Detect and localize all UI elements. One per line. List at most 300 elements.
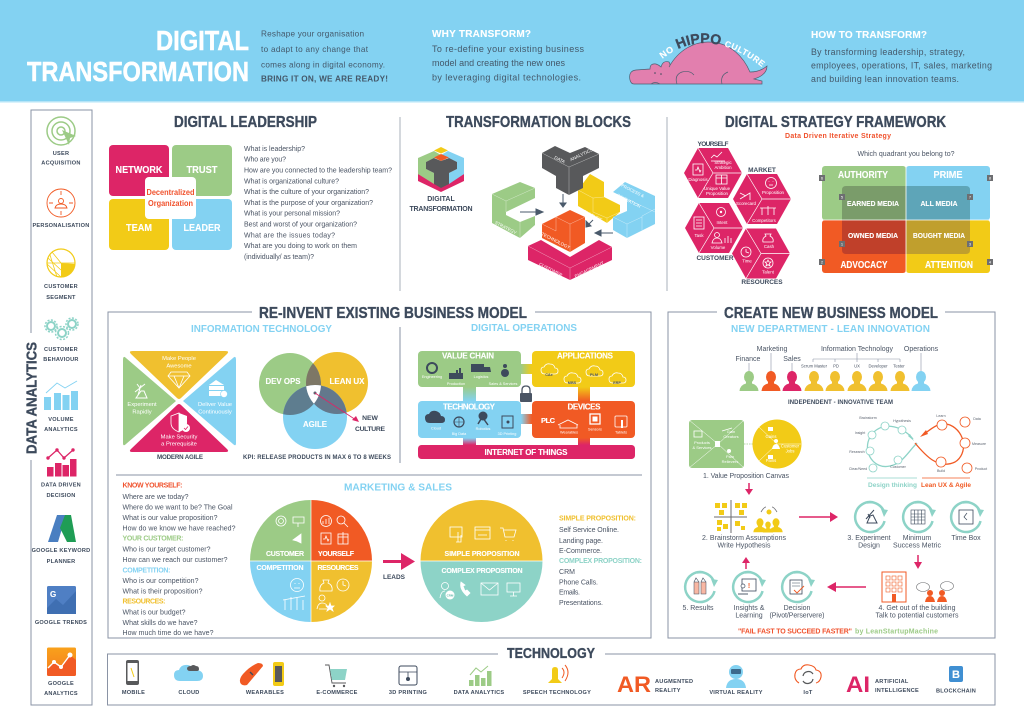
diagram: venn new culture [259,352,385,449]
diagram: modern agile: Rapidly [132,410,152,416]
minimum success metric: Minimum [903,535,931,542]
kpi note: KPI: RELEASE PRODUCTS IN MAX 6 TO 8 WEEKS [243,455,391,461]
insights and learning [731,570,766,620]
step 4: get out of the building: Talk to potential customers [876,612,959,620]
item: augmented reality: AR [617,672,651,697]
item: mobile: MOBILE [122,690,145,696]
arrow: leads: LEADS [383,574,406,581]
block: applications: ERP [613,381,621,385]
how to transform: employees, operations, IT, sales, marketing [811,60,992,70]
chart: proposition circle: COMPLEX PROPOSITION [442,568,522,575]
media quadrant matrix: 6 [821,176,824,180]
media quadrant matrix: BOUGHT MEDIA [913,231,966,240]
item: 3d printing: 3D PRINTING [389,690,427,696]
diagram: value proposition canvas: Gain [727,429,735,434]
block: technology: 3D Printing [498,432,516,436]
icon: user acquisition [47,117,76,145]
block: process and innovation [613,182,655,238]
diagram: design thinking and lean loops: Customer [890,465,907,469]
leadership questions: (individually/ as team)? [244,254,314,261]
icon: data driven decision [46,448,76,476]
marketing questions: YOUR CUSTOMER: [122,536,184,542]
hexagon: market: Scorecard [736,201,757,206]
block: internet of things [418,445,635,459]
item: artificial intelligence: ARTIFICIAL [875,679,909,685]
chart: four segment circle: CUSTOMER [266,551,304,558]
diagram: modern agile: Continuously [198,410,232,416]
diagram: value proposition canvas: & Services [692,445,712,450]
decision: (Pivot/Perservere) [770,612,824,620]
diagram: venn new culture: CULTURE [355,426,385,433]
hexagon: yourself: Proposition [706,191,729,196]
diagram: modern agile: Make Security [161,434,197,440]
block: customer engagement: ENGAGEMENT [574,260,605,279]
label: google keyword planner: PLANNER [47,559,75,565]
icon: flask [135,384,147,398]
cube caption [410,196,472,213]
arrows [520,194,613,236]
label: customer behaviour [43,347,79,363]
media quadrant matrix: EARNED MEDIA [847,199,900,208]
label: user acquisition: USER [53,151,69,157]
intro text [261,30,388,84]
media quadrant matrix: 1 [841,242,844,246]
item: data analytics: DATA ANALYTICS [454,690,504,696]
label: data driven decision [41,482,81,499]
panel: re-invent existing business model [108,305,651,638]
hexagon: customer: Intent [716,220,728,225]
media quadrant matrix [819,166,993,273]
block: technology [541,210,585,252]
label: customer segment: SEGMENT [46,295,76,301]
slogan: "FAIL FAST TO SUCCEED FASTER" [738,628,852,636]
label: personalisation: PERSONALISATION [32,223,90,229]
diagram: venn new culture: AGILE [303,419,327,429]
proposition list: Emails. [559,590,580,596]
hexagon: market: MARKET [748,167,776,174]
diagram: venn new culture: LEAN UX [330,376,365,386]
item: speech technology [523,665,591,696]
chart: four segment circle: YOURSELF [318,551,355,558]
chart: proposition circle [420,500,542,622]
hexagon: customer [685,203,743,262]
item: augmented reality: REALITY [655,688,681,694]
proposition list: E-Commerce. [559,548,602,555]
item: wearables: WEARABLES [246,690,284,696]
subpanel heading: information technology: INFORMATION TECHNOLOGY [191,324,332,335]
decision: Decision [784,605,811,612]
label: customer behaviour: CUSTOMER [44,347,78,353]
label: customer segment: CUSTOMER [44,284,78,290]
icon: personalisation [47,189,75,217]
icon: google trends [47,586,76,614]
hexagon: customer: CUSTOMER [696,255,734,262]
diagram: design thinking and lean loops: Product [975,467,987,471]
block: value chain: VALUE CHAIN [442,352,494,360]
block: strategy: STRATEGY [494,220,517,235]
arrow: leads [383,553,415,581]
sidebar heading: DATA ANALYTICS [24,342,40,454]
block: devices: DEVICES [568,402,601,412]
team org chart: Information Technology [821,346,894,353]
diagram: modern agile: Make People [162,356,196,362]
block: technology: Big Data [452,432,467,436]
icon: customer segment [47,249,75,277]
marketing questions: Where are we today? [122,494,189,501]
leadership questions: What is the culture of your organization? [244,189,369,196]
item: augmented reality: AUGMENTED [655,679,693,685]
marketing questions: Where do we want to be? The Goal [122,504,233,512]
panel: digital strategy framework [684,114,993,286]
item: e-commerce [316,665,358,696]
block: culture [578,174,620,223]
diagram: value proposition canvas [689,420,802,480]
team org chart: INDEPENDENT - INNOVATIVE TEAM [788,400,893,406]
block: applications: MBS [568,381,577,385]
intro text: BRING IT ON, WE ARE READY! [261,74,388,84]
chart: four segment circle [250,500,372,622]
how to transform: HOW TO TRANSFORM? [811,30,927,41]
block: devices [532,401,635,438]
step 4: get out of the building [876,572,959,620]
why transform [432,29,584,82]
intro text: to adapt to any change that [261,45,369,54]
arrow [745,483,753,495]
hexagon: market: Proposition [762,190,785,195]
step 2: brainstorm [702,500,786,550]
arrow [742,557,750,569]
block: value chain: Sales & Services [489,382,517,386]
leadership questions: How are you connected to the leadership team? [244,168,392,174]
diagram: digital operations [418,351,635,459]
leadership questions: What is your personal mission? [244,211,340,218]
diagram: value proposition canvas: Pain [726,454,734,459]
marketing questions: How much time do we have? [122,630,214,637]
heading: RE-INVENT EXISTING BUSINESS MODEL [259,305,527,322]
chart: four segment circle: RESOURCES [318,565,359,572]
block: customer engagement [528,240,612,280]
panel: data analytics sidebar [24,110,92,705]
diagram: value proposition canvas: Creators [723,434,739,439]
quadrant diagram: Organization [148,199,193,208]
step 3: experiment design [847,500,891,550]
heading: DIGITAL STRATEGY FRAMEWORK [725,114,946,131]
marketing questions: What is our budget? [122,610,186,616]
hexagon: resources: RESOURCES [741,279,783,286]
quadrant diagram: NETWORK [116,165,163,176]
media quadrant matrix: 3 [969,242,972,246]
proposition list: Self Service Online. [559,527,619,534]
label: google keyword planner: GOOGLE KEYWORD [32,548,90,554]
team org chart: Finance [736,356,761,363]
hexagon: resources: Time [742,258,752,264]
block: applications [532,351,635,387]
why transform: To re-define your existing business [432,44,584,54]
item: augmented reality [617,672,693,697]
results: 5. Results [682,605,714,612]
block: devices: Sensors [588,428,602,432]
leadership questions: What are the issues today? [244,232,335,239]
icon: shield [171,413,190,432]
media quadrant matrix: AUTHORITY [838,170,888,181]
block: value chain [418,351,521,387]
item: cloud: CLOUD [178,690,200,696]
item: virtual reality [709,665,763,696]
step 3: experiment design: 3. Experiment [847,535,891,542]
block: devices: PLC [541,416,556,425]
chart: proposition circle: CRM [447,594,454,598]
hexagon: customer: Volume [711,245,726,250]
title [27,25,249,87]
hexagon: customer: Task [694,233,704,238]
hexagon: yourself [684,141,742,198]
item: blockchain: BLOCKCHAIN [936,688,976,694]
block: applications: PLM [590,373,598,377]
marketing questions: What is their proposition? [122,588,203,596]
how to transform [811,30,992,84]
media quadrant matrix: ALL MEDIA [920,199,958,208]
icon: google analytics [47,648,76,676]
diagram: value proposition canvas: Relievers [722,459,738,464]
title: TRANSFORMATION [27,56,249,87]
how to transform: By transforming leadership, strategy, [811,47,965,57]
insights and learning: Insights & [734,605,765,612]
quadrant diagram: TEAM [126,223,152,234]
marketing questions: How can we reach our customer? [122,557,228,564]
media quadrant matrix: OWNED MEDIA [848,231,899,240]
hexagon: yourself: YOURSELF [698,141,729,148]
step 3: experiment design: Design [858,542,880,550]
leadership questions: What is leadership? [244,146,305,153]
block: value chain: Engineering [422,375,442,379]
item: artificial intelligence: INTELLIGENCE [875,688,919,694]
intro text: Reshape your organisation [261,30,364,38]
icon: box with badge [209,380,228,398]
diagram: design thinking and lean loops: Learn [936,414,946,418]
hexagon: resources: Talent [762,270,775,274]
proposition list: Landing page. [559,538,603,545]
minimum success metric [893,500,942,550]
panel: technology [108,646,995,705]
diagram: venn new culture: DEV OPS [266,376,301,386]
hexagon: market: Competitors [752,218,777,223]
icons: competition [283,578,305,610]
heading: DIGITAL LEADERSHIP [174,114,317,131]
block: customer engagement: CUSTOMER [538,262,564,278]
team org chart: Tester [893,364,905,368]
icon: volume analytics [44,381,78,410]
media quadrant matrix: ATTENTION [925,260,973,271]
proposition list: SIMPLE PROPOSITION: [559,516,636,522]
icon: diamond [168,372,190,388]
quadrant diagram: LEADER [184,223,221,234]
marketing questions: How do we know we have reached? [122,526,236,532]
insights and learning: Learning [735,612,763,620]
icon: google keyword planner [48,515,76,542]
item: 3d printing [389,666,427,696]
item: data analytics [454,666,504,696]
cube caption: DIGITAL [427,196,455,203]
slogan [738,628,938,636]
slogan: by LeanStartupMachine [855,628,938,636]
heading: TRANSFORMATION BLOCKS [446,114,631,131]
label: customer behaviour: BEHAVIOUR [43,357,79,363]
why transform: by leveraging digital technologies. [432,72,581,82]
item: wearables [240,662,284,696]
media quadrant matrix: 8 [989,176,992,180]
label: volume analytics: ANALYTICS [44,427,78,433]
block: value chain: Logistics [474,375,488,379]
marketing questions: Who is our target customer? [122,546,211,554]
item: iot: IoT [803,690,813,696]
team org chart [736,346,939,406]
icon: padlock [520,386,532,402]
hexagon: yourself: Unique Value [704,186,731,191]
icons: yourself [320,516,348,544]
block: technology: TECHNOLOGY [443,402,496,412]
insights and learning: ! [748,583,750,590]
quadrant diagram: Decentralized [146,188,195,197]
why transform: model and creating the new ones [432,58,566,68]
diagram: design thinking and lean loops: Clear/Need [849,467,867,471]
label: google keyword planner [32,548,90,565]
diagram: modern agile: MODERN AGILE [157,454,203,461]
block: applications: CAe [545,373,553,377]
label: volume analytics [44,417,78,433]
team org chart: Scrum Master [801,364,828,368]
cube caption: TRANSFORMATION [410,206,472,213]
diagram: value proposition canvas: Products [694,440,710,445]
item: mobile [122,660,145,696]
team org chart: Sales [783,356,801,363]
block: technology: Robotics [476,427,490,431]
leadership questions [244,146,392,261]
arrow [914,555,922,569]
icons: complex proposition [440,582,520,598]
item: artificial intelligence: AI [846,672,870,697]
intro text: comes along in digital economy. [261,60,385,70]
block: data analytics: ANALYTICS [569,147,594,162]
block: strategy [492,182,535,238]
header banner [0,0,1024,102]
leadership questions: Who are you? [244,157,286,164]
label: volume analytics: VOLUME [48,417,74,423]
panel: create new business model [668,305,995,638]
team org chart: Operations [904,346,939,353]
panel: digital leadership [109,114,392,261]
panel: transformation blocks [410,114,655,280]
hexagon: yourself: Strategic [714,160,732,165]
time box: Time Box [951,535,981,542]
item: blockchain: B [952,669,960,681]
hexagon: market [733,167,791,224]
diagram: venn new culture: NEW [362,415,379,422]
media quadrant matrix: 7 [969,194,972,200]
icon: customer behaviour [45,318,78,340]
hexagon: yourself: Ambition [714,165,732,170]
diagram: modern agile: Experiment [127,402,157,408]
leadership questions: What is organizational culture? [244,178,339,185]
item: e-commerce: E-COMMERCE [316,690,358,696]
item: virtual reality: VIRTUAL REALITY [709,690,763,696]
marketing questions: Who is our competition? [122,578,199,585]
hexagon: resources: Cash [764,244,775,249]
leadership questions: What is the purpose of your organization? [244,200,373,207]
icon: no hippo culture: NO HIPPO CULTURE [659,33,766,67]
media quadrant matrix: PRIME [934,170,963,181]
team org chart: PD [833,364,839,368]
proposition list: Phone Calls. [559,580,598,586]
label: google analytics [44,681,78,697]
diagram: design thinking and lean loops: Build [937,469,945,473]
marketing questions: What skills do we have? [122,620,198,627]
media quadrant matrix: 5 [841,194,844,200]
marketing questions: What is our value proposition? [122,515,218,522]
chart: proposition circle: SIMPLE PROPOSITION [444,551,520,558]
chart: four segment circle: COMPETITION [256,565,304,572]
leadership questions: Best and worst of your organization? [244,222,357,228]
team org chart: UX [854,364,860,368]
diagram: modern agile: a Prerequisite [161,442,197,448]
quadrant question: Which quadrant you belong to? [858,151,955,158]
arrow [799,512,838,522]
quadrant diagram: TRUST [186,165,218,176]
step 2: brainstorm: 2. Brainstorm Assumptions [702,535,786,542]
label: google trends: GOOGLE TRENDS [35,620,87,626]
label: user acquisition: ACQUISITION [41,160,81,166]
diagram: design thinking and lean loops: Measure [972,442,986,446]
team org chart: Developer [868,364,888,368]
block: devices: Wearables [560,430,578,434]
item: cloud [174,665,203,696]
block: technology: TECHNOLOGY [541,231,571,250]
block: value chain: Production [447,382,465,386]
decision [770,570,824,620]
results [682,570,718,612]
block: culture: CULTURE [582,209,603,223]
diagram: modern agile: Deliver Value [198,402,232,408]
label: data driven decision: DATA DRIVEN [41,482,81,488]
subheading: Data Driven Iterative Strategy [785,133,891,140]
block: technology: Cloud [431,426,441,430]
icon: small cube [418,147,464,192]
block: data analytics [542,146,599,195]
team org chart: Marketing [757,346,787,353]
diagram: value proposition canvas: Gains [766,434,776,439]
hexagon: yourself: Diagnosis [688,177,708,182]
hexagon: resources [732,228,790,286]
diagram: design thinking and lean loops: Hypothesis [893,419,911,423]
block: process and innovation: INNOVATION [616,193,641,209]
heading: TECHNOLOGY [507,646,595,662]
diagram: design thinking and lean loops [849,414,987,489]
subheading: NEW DEPARTMENT - LEAN INNOVATION [731,324,930,335]
icon: no hippo culture [629,33,768,84]
subpanel heading: marketing and sales: MARKETING & SALES [344,482,452,494]
icons: simple proposition [450,527,516,542]
block: applications: APPLICATIONS [557,352,614,360]
diagram: modern agile: Awesome [166,364,192,370]
block: technology [418,401,521,438]
item: iot [795,665,821,696]
minimum success metric: Success Metric [893,542,942,550]
label: google analytics: GOOGLE [48,681,74,687]
diagram: value proposition canvas: Customer [781,444,800,448]
step 2: brainstorm: Write Hypothesis [718,542,771,550]
step 4: get out of the building: 4. Get out of the building [878,605,956,612]
block: data analytics: DATA [553,155,566,164]
proposition list: CRM [559,569,575,576]
